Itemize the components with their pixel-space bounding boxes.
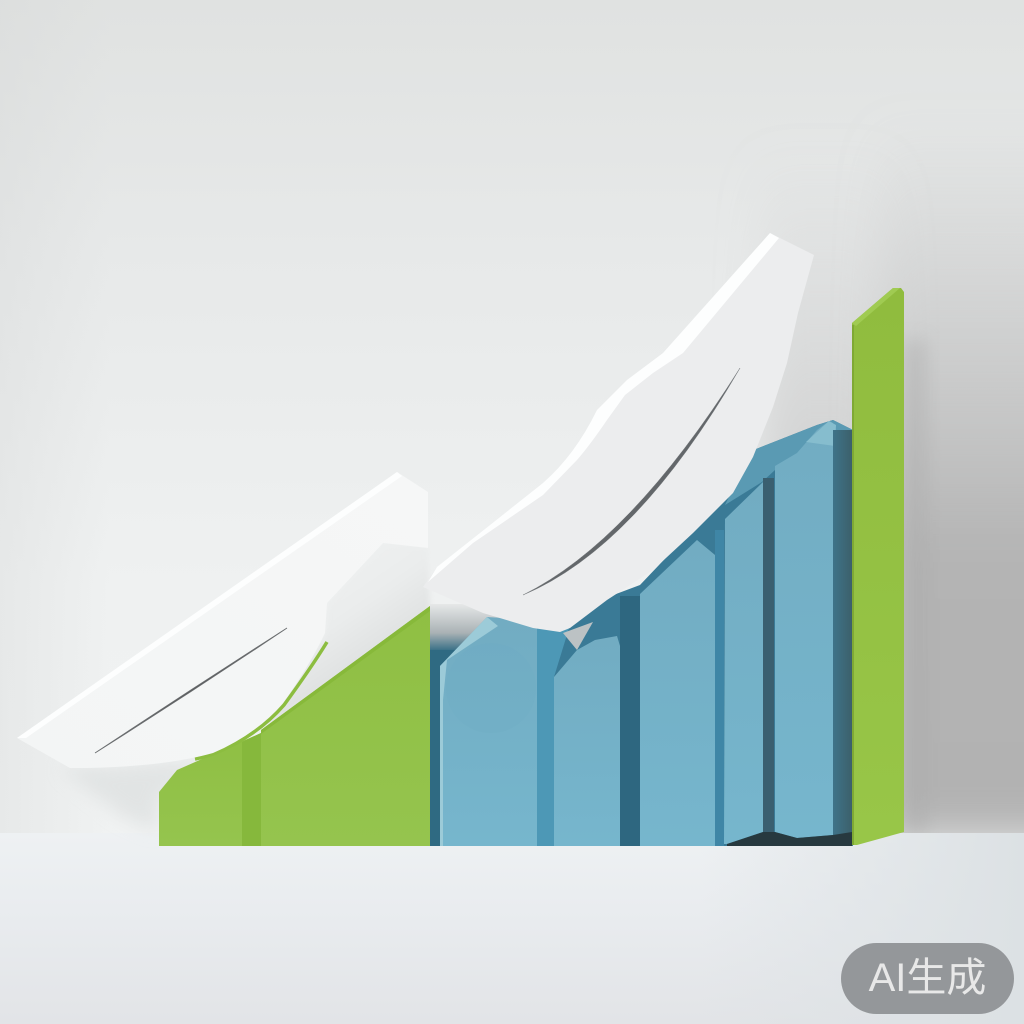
badge: AI generated bbox=[841, 943, 1014, 1014]
blue bar 1 bbox=[440, 617, 537, 846]
leaf body bbox=[17, 472, 428, 768]
blue gap 1-2 bbox=[537, 625, 570, 846]
tall green bar bbox=[852, 288, 904, 845]
dark back plane bbox=[537, 420, 853, 846]
blue bar 5 bbox=[775, 421, 833, 838]
green leaf rim bbox=[195, 642, 327, 759]
left leaf neck shadow bbox=[261, 543, 430, 735]
large green wedge bar bbox=[261, 606, 430, 846]
floor bbox=[0, 833, 1024, 1024]
shaded side of bar 5 bbox=[833, 430, 853, 835]
dark floor contact bbox=[727, 832, 852, 846]
dark gap 4-5 bbox=[763, 478, 774, 835]
blue bar 2 bbox=[554, 636, 620, 846]
left white leaf bbox=[17, 472, 428, 768]
right white leaf bbox=[423, 233, 814, 632]
leaf body bbox=[423, 233, 814, 632]
shadow under left leaf bbox=[60, 760, 215, 832]
dark gap 2-3 bbox=[620, 596, 640, 846]
leaf highlight band bbox=[428, 233, 779, 582]
blue bars bbox=[430, 420, 853, 846]
leaf slit bbox=[523, 368, 740, 595]
bar 5 top bevel bbox=[806, 421, 836, 446]
shaded gap behind blue bars bbox=[430, 604, 500, 652]
leaf slit bbox=[95, 628, 287, 753]
blue bar 4 bbox=[724, 482, 763, 844]
upper back bevel bbox=[725, 420, 853, 505]
leaf top highlight bbox=[17, 472, 402, 738]
small green bar bbox=[159, 733, 261, 846]
gap 3-4 bbox=[715, 530, 724, 846]
badge: AI generated: AI生成 bbox=[869, 956, 986, 1000]
blue bar 3 bbox=[640, 540, 715, 846]
gray notch bbox=[563, 622, 593, 650]
